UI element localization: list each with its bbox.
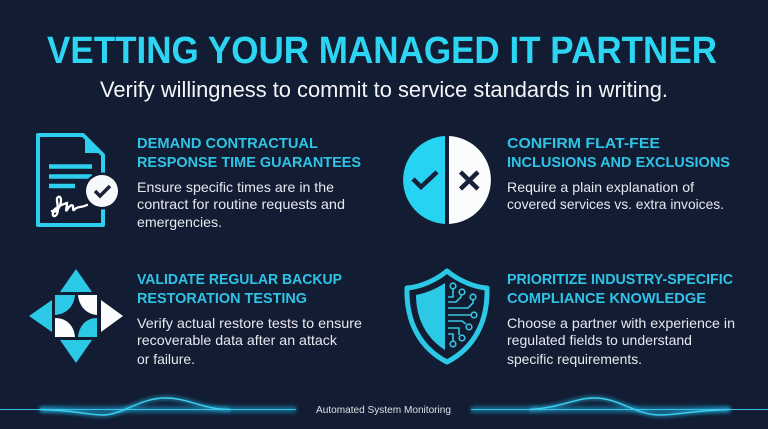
heading: CONFIRM FLAT-FEE [507,135,660,152]
panel: compliance knowledge: COMPLIANCE KNOWLEDGE [507,290,706,307]
icon: check and cross circle [403,136,491,224]
panel: flat-fee inclusions: INCLUSIONS AND EXCLUSIONS [507,154,730,171]
text block: regulated fields to understand [507,332,692,348]
text block: contract for routine requests and [137,196,345,212]
text block: Verify actual restore tests to ensure [137,315,362,331]
text block: covered services vs. extra invoices. [507,196,724,212]
icon: signed contract [38,135,120,225]
text block: specific requirements. [507,351,642,367]
text block: Require a plain explanation of [507,179,694,195]
wave: left monitoring signal [0,398,296,415]
text block: Ensure specific times are in the [137,179,334,195]
wave: right monitoring signal [471,398,768,415]
text block [507,315,735,367]
text block [137,315,362,367]
text block: emergencies. [137,214,222,230]
title: VETTING YOUR MANAGED IT PARTNER [47,30,717,72]
icon: restoration arrows [29,269,123,363]
panel: flat-fee inclusions [403,135,730,224]
subtitle: Verify willingness to commit to service standards in writing. [100,77,668,102]
text block: or failure. [137,351,195,367]
text block: recoverable data after an attack [137,332,338,348]
text block [507,179,724,212]
panel: backup restoration [29,269,362,367]
heading: PRIORITIZE INDUSTRY-SPECIFIC [507,271,733,288]
icon: circuit shield [407,271,487,362]
text block: Choose a partner with experience in [507,315,735,331]
text block [137,179,345,230]
heading: VALIDATE REGULAR BACKUP [137,271,342,288]
footer label: Automated System Monitoring [316,404,451,416]
panel: response time guarantees [38,135,361,230]
heading: DEMAND CONTRACTUAL [137,135,318,152]
panel: response time guarantees: RESPONSE TIME GUARANTEES [137,154,361,171]
panel: compliance knowledge [407,271,735,367]
panel: backup restoration: RESTORATION TESTING [137,290,307,307]
